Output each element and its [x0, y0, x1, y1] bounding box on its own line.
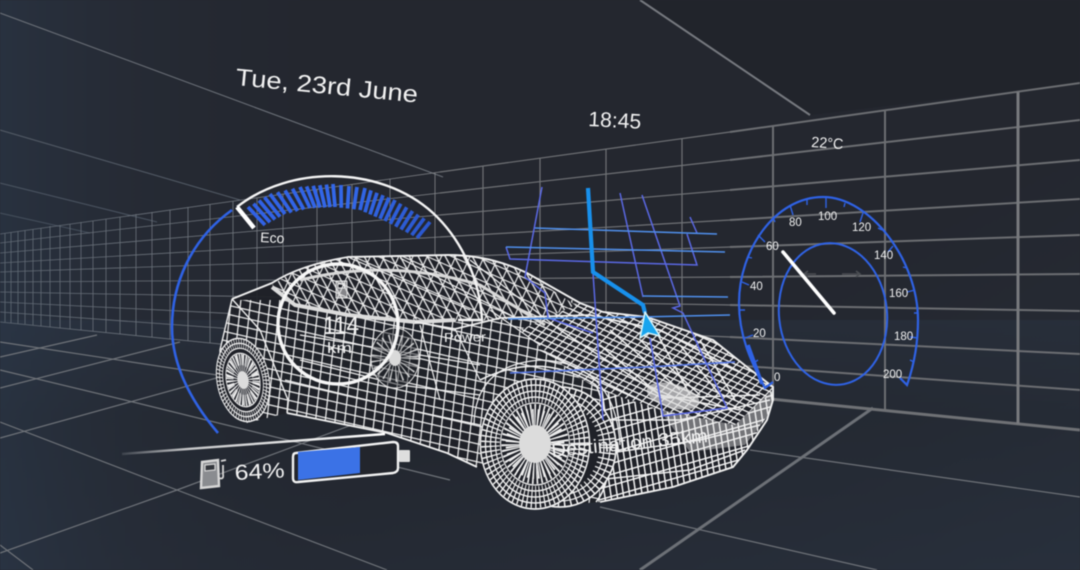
dial numbers: 140 — [874, 250, 893, 262]
dial numbers: 20 — [753, 328, 766, 340]
range circle — [278, 264, 398, 384]
battery fill — [298, 447, 360, 480]
dial numbers: 200 — [883, 369, 902, 381]
white arc — [237, 176, 482, 320]
power label: Power — [444, 329, 487, 345]
front wheel — [480, 379, 590, 509]
dial numbers — [750, 211, 913, 384]
battery nub — [399, 450, 410, 462]
headlight cluster — [644, 377, 702, 415]
body base — [220, 255, 773, 505]
dial numbers: 120 — [852, 222, 871, 234]
outer dial — [739, 197, 918, 388]
battery status — [122, 434, 410, 488]
eco label: Eco — [260, 229, 285, 246]
dial numbers: 160 — [889, 288, 908, 300]
body contour lines — [220, 255, 773, 502]
dial numbers: 100 — [818, 211, 837, 223]
percentage: 64% — [234, 458, 285, 485]
dial numbers: 80 — [789, 217, 802, 229]
dial numbers: 60 — [766, 241, 779, 253]
battery shell — [293, 442, 398, 482]
range value: 114 — [323, 312, 359, 340]
front tyre — [504, 387, 616, 507]
blue segment ticks — [248, 184, 430, 238]
icon: charging station — [201, 460, 226, 488]
mesh panels — [210, 255, 773, 520]
icon: navigation arrow — [640, 312, 660, 338]
speedometer — [739, 197, 918, 390]
date: Tue, 23rd June — [234, 64, 419, 109]
temperature: 22°C — [811, 134, 844, 153]
needle — [783, 252, 834, 313]
faint indicators — [804, 271, 860, 277]
inner dial — [772, 238, 894, 390]
gauge: eco to power arc — [172, 176, 482, 433]
blue left arc — [172, 210, 232, 433]
navigation map — [506, 187, 735, 420]
baseline bar — [122, 434, 385, 454]
wall grid — [0, 83, 1080, 430]
dial numbers: 0 — [774, 372, 780, 384]
time: 18:45 — [588, 108, 642, 134]
route — [588, 188, 645, 313]
far side wheel — [371, 328, 419, 388]
dial numbers: 180 — [894, 331, 913, 343]
range unit: km — [327, 340, 352, 357]
dial numbers: 40 — [750, 281, 763, 293]
dial ticks — [740, 197, 918, 362]
rear wheel — [210, 334, 276, 426]
wireframe car — [210, 255, 773, 520]
icon: fuel pump small — [336, 281, 347, 298]
destination label: Destination 35km — [550, 426, 709, 462]
eco tick — [237, 207, 254, 228]
